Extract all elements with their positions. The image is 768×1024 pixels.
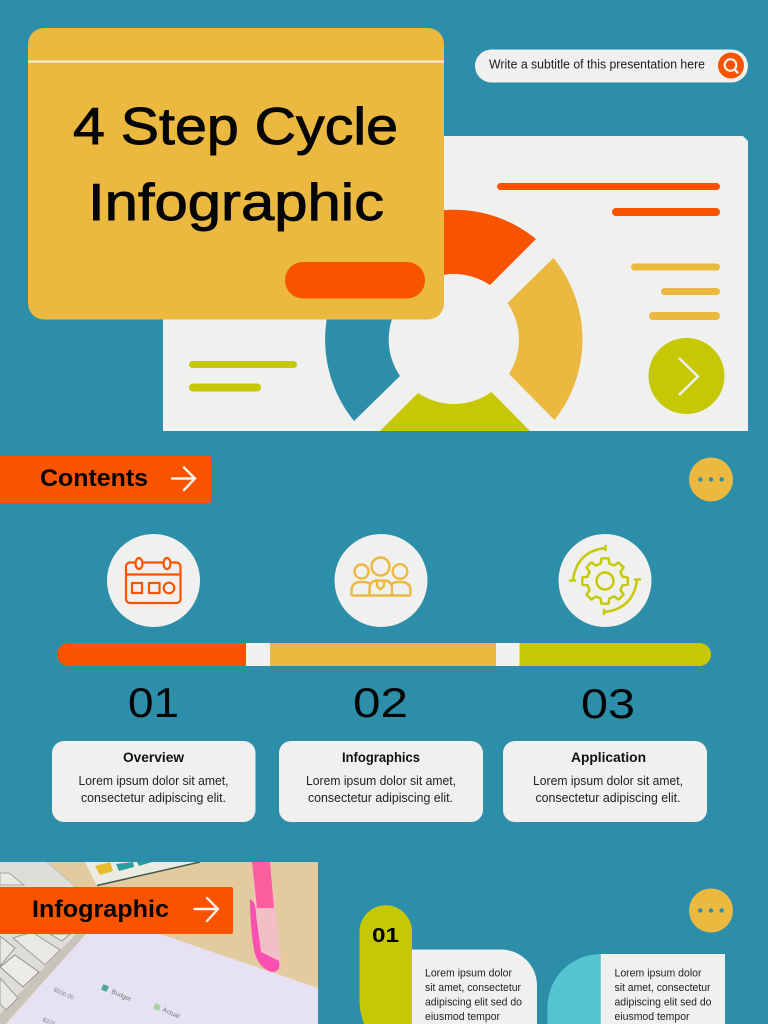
card: infographics <box>279 741 483 822</box>
chart: donut cycle <box>325 210 582 431</box>
icon: gear cycle <box>558 534 652 627</box>
card: infographics: Infographics <box>342 749 420 765</box>
panel: step 02 text: eiusmod tempor <box>614 1011 690 1023</box>
highlighter <box>250 862 281 972</box>
calculator <box>85 862 200 886</box>
card: application: consectetur adipiscing elit. <box>536 790 680 805</box>
yellow placeholder lines <box>631 264 720 320</box>
panel: step 01 text <box>412 950 537 1024</box>
orange placeholder lines <box>497 183 720 216</box>
heading: infographic banner <box>0 887 233 934</box>
card: application: Lorem ipsum dolor sit amet, <box>533 773 683 788</box>
timeline bar <box>57 643 711 666</box>
paper with chart <box>6 934 318 1024</box>
card: application: Application <box>571 749 646 765</box>
heading: infographic banner: Infographic <box>32 896 169 923</box>
paper with chart: Actual <box>161 1006 181 1020</box>
card: infographics: Lorem ipsum dolor sit amet, <box>306 773 456 788</box>
heading: contents banner: Contents <box>40 465 148 492</box>
card: overview <box>52 741 256 822</box>
icon: arrow <box>172 468 195 490</box>
panel: step 02 text: Lorem ipsum dolor <box>614 968 702 980</box>
panel: title card <box>28 28 444 320</box>
step numbers: 01 <box>128 679 179 726</box>
paper with chart: Budget <box>110 988 132 1003</box>
keyboard <box>0 862 86 1024</box>
icon: next chevron button <box>648 338 724 414</box>
subtitle search bar: Write a subtitle of this presentation here <box>489 58 705 72</box>
orange pill <box>285 262 425 298</box>
title: 4 Step Cycle <box>73 98 398 156</box>
panel: step 02 text <box>601 954 725 1024</box>
card: overview: Overview <box>123 749 184 765</box>
panel: step 01 text: adipiscing elit sed do <box>425 996 522 1008</box>
paper with chart: $500.00 <box>52 987 75 1002</box>
panel: step 01 text: Lorem ipsum dolor <box>425 968 512 980</box>
icon: arrow <box>194 898 218 921</box>
icon: search <box>718 52 744 78</box>
step 01 tab: 01 <box>372 925 399 947</box>
icon: more dots <box>689 888 733 932</box>
panel: step 01 text: sit amet, consectetur <box>425 982 521 994</box>
green placeholder lines <box>189 361 297 392</box>
card: application <box>503 741 707 822</box>
step numbers <box>128 679 635 727</box>
subtitle search bar <box>475 50 748 82</box>
step numbers: 02 <box>353 679 408 726</box>
icon: more dots <box>689 458 733 502</box>
photo: desk with keyboard, calculator, paper and highlighter <box>0 862 318 1024</box>
title: Infographic <box>88 174 384 232</box>
step numbers: 03 <box>581 680 635 727</box>
step 02 tab <box>548 954 601 1024</box>
card: infographics: consectetur adipiscing elit. <box>308 790 453 805</box>
step 01 tab <box>360 905 412 1024</box>
icon: team <box>334 534 428 627</box>
card: overview: Lorem ipsum dolor sit amet, <box>78 773 228 788</box>
panel: step 02 text: adipiscing elit sed do <box>614 996 712 1008</box>
title <box>73 98 398 232</box>
icon: calendar <box>107 534 200 627</box>
heading: contents banner <box>0 456 211 503</box>
card: overview: consectetur adipiscing elit. <box>81 790 226 805</box>
panel: step 01 text: eiusmod tempor <box>425 1011 500 1023</box>
panel: step 02 text: sit amet, consectetur <box>614 982 711 994</box>
panel: presentation slide with donut <box>163 136 748 431</box>
